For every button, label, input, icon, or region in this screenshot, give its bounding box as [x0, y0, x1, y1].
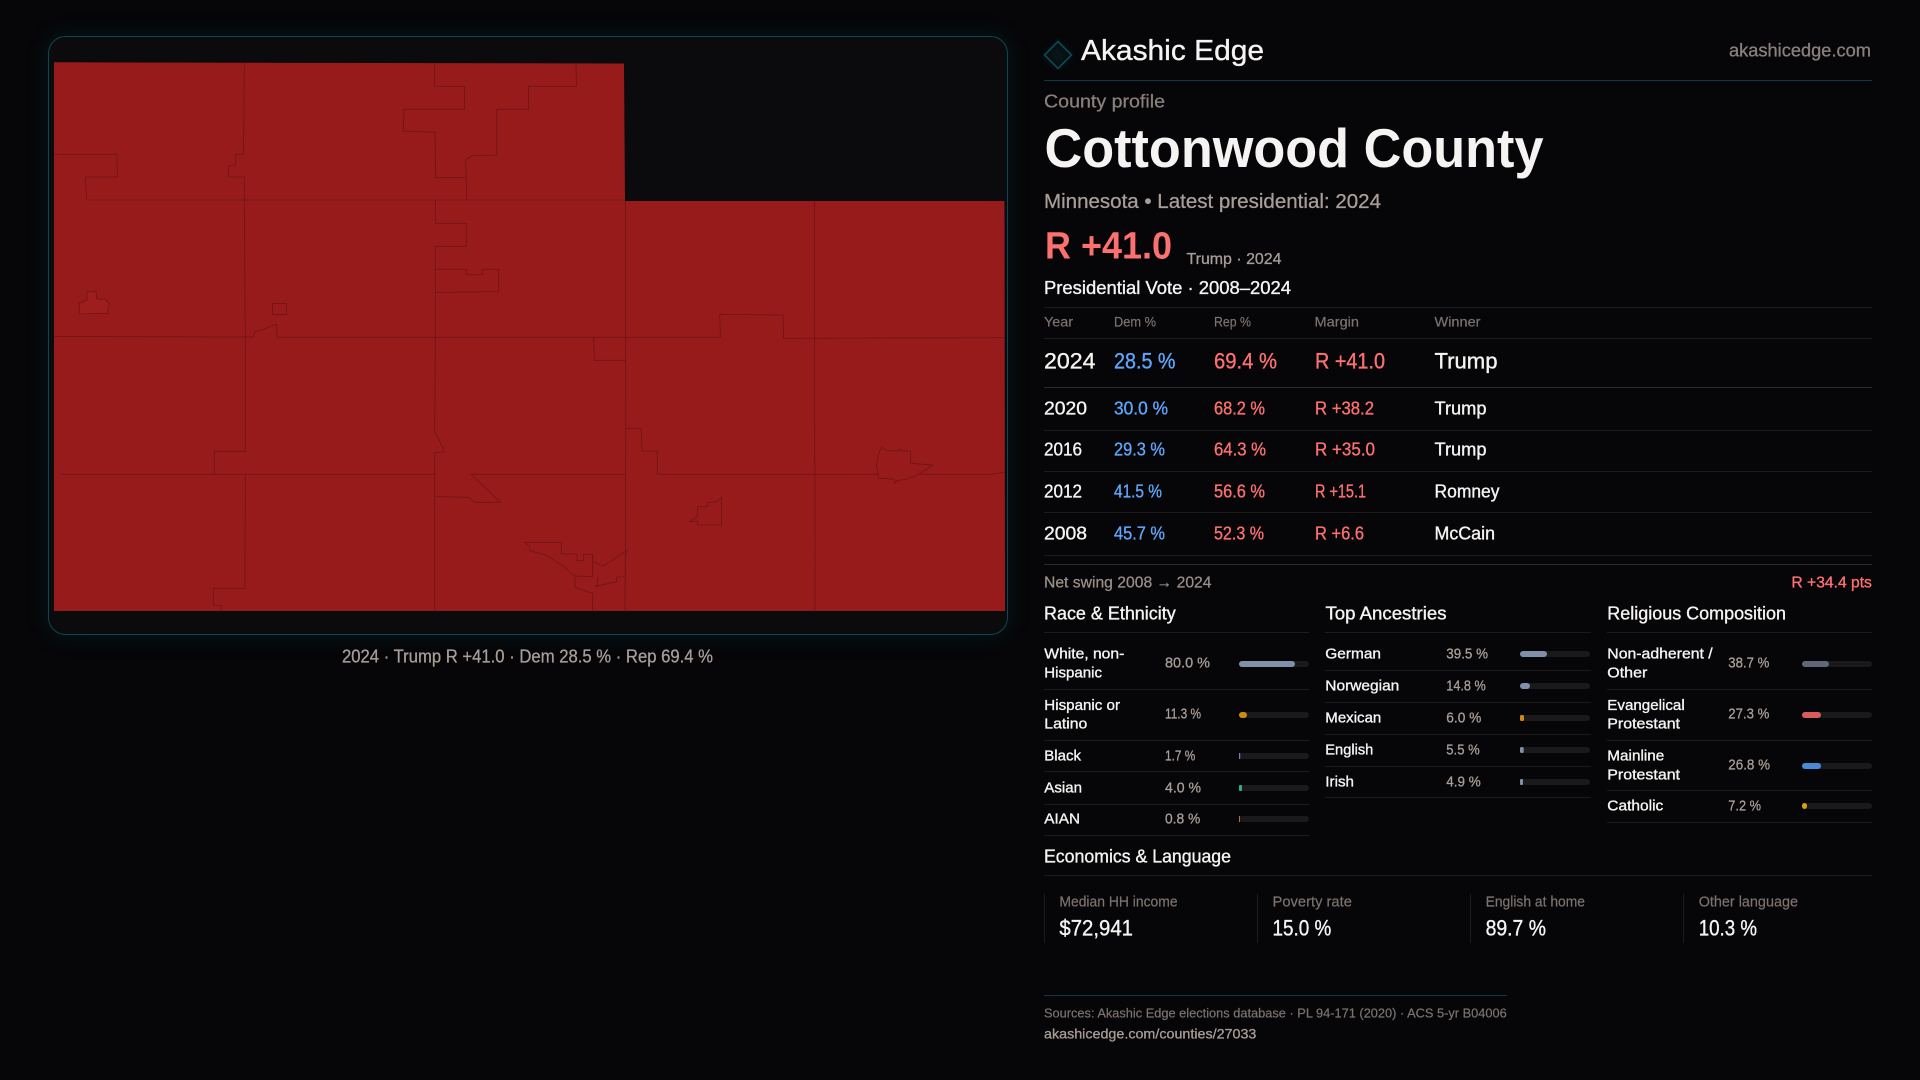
row 2016: 2016 [1044, 439, 1082, 459]
presidential vote table [1044, 308, 1872, 556]
stat: poverty rate: 15.0 % [1272, 916, 1331, 941]
row: hispanic or latino: Latino [1044, 716, 1087, 733]
row: german: German [1325, 646, 1381, 663]
table header row: Dem % [1114, 315, 1156, 330]
row: white non-hispanic [1044, 645, 1309, 681]
row 2016: Trump [1434, 439, 1486, 459]
row 2008: 52.3 % [1214, 523, 1264, 543]
row 2020: Trump [1434, 398, 1486, 418]
heading: religious composition: Religious Composition [1607, 603, 1786, 623]
row: mainline protestant: 26.8 % [1728, 756, 1770, 773]
stat: english at home: English at home [1486, 895, 1585, 911]
panel: top ancestries [1325, 603, 1591, 798]
row: evangelical protestant: 27.3 % [1728, 706, 1769, 723]
row: hispanic or latino: 11.3 % [1165, 706, 1201, 723]
row 2012: 56.6 % [1214, 481, 1265, 501]
stat: median income: Median HH income [1059, 895, 1178, 911]
stat: poverty rate: Poverty rate [1272, 895, 1352, 911]
row: mainline protestant [1607, 748, 1872, 783]
table header row: Rep % [1214, 315, 1251, 330]
row: aian: 0.8 % [1165, 811, 1200, 828]
row 2012: 2012 [1044, 481, 1082, 501]
map caption: 2024 · Trump R +41.0 · Dem 28.5 % · Rep 69.4 % [342, 646, 713, 666]
row: black: 1.7 % [1165, 748, 1195, 765]
panel: economics and language [1044, 846, 1872, 943]
row 2024: 28.5 % [1114, 348, 1176, 373]
net swing note: Net swing 2008 → 2024 [1044, 574, 1212, 591]
row: norwegian: 14.8 % [1446, 678, 1486, 695]
net swing note: R +34.4 pts [1791, 574, 1872, 591]
stat: poverty rate [1258, 894, 1352, 943]
row: non-adherent [1607, 645, 1872, 681]
row 2016 [1044, 439, 1486, 459]
row: mexican: Mexican [1325, 710, 1381, 727]
row: non-adherent: Non-adherent / [1607, 645, 1714, 662]
row: german [1325, 646, 1590, 663]
row 2020: 68.2 % [1214, 398, 1265, 418]
row: catholic: Catholic [1607, 797, 1664, 814]
brand name: Akashic Edge [1081, 35, 1264, 67]
sources footer: akashicedge.com/counties/27033 [1044, 1025, 1257, 1041]
row 2024: R +41.0 [1315, 348, 1385, 373]
row 2024 [1044, 348, 1498, 373]
heading: race and ethnicity: Race & Ethnicity [1044, 603, 1176, 623]
title: Cottonwood County [1044, 117, 1544, 179]
brand header [1044, 35, 1871, 69]
row: irish [1325, 774, 1590, 791]
map: county precincts, all Republican-won [54, 62, 1005, 611]
row: catholic [1607, 797, 1872, 814]
row: asian: 4.0 % [1165, 780, 1201, 797]
row: mexican: 6.0 % [1446, 710, 1481, 727]
row: mainline protestant: Mainline [1607, 748, 1664, 765]
heading: economics and language: Economics & Language [1044, 846, 1231, 866]
row: mainline protestant: Protestant [1607, 766, 1681, 783]
row 2020: R +38.2 [1315, 398, 1374, 418]
row: asian: Asian [1044, 780, 1082, 797]
row 2012: R +15.1 [1315, 481, 1366, 501]
row 2016: R +35.0 [1315, 439, 1375, 459]
icon: diamond logo [1044, 41, 1072, 69]
stat: english at home [1470, 894, 1585, 943]
table header row [1044, 315, 1481, 330]
row: english: 5.5 % [1446, 742, 1480, 759]
row 2024: 2024 [1044, 348, 1096, 373]
heading: top ancestries: Top Ancestries [1326, 603, 1446, 623]
row: norwegian [1325, 678, 1590, 695]
row 2008: 2008 [1044, 523, 1087, 543]
panel: county map [48, 36, 1008, 635]
row: catholic: 7.2 % [1728, 797, 1761, 814]
stat: other language: Other language [1699, 895, 1798, 911]
stat: median income [1044, 894, 1178, 943]
headline margin [1045, 226, 1282, 268]
row: white non-hispanic: Hispanic [1044, 664, 1102, 681]
row: evangelical protestant: Protestant [1607, 716, 1681, 733]
row 2008: 45.7 % [1114, 523, 1165, 543]
stat: other language: 10.3 % [1699, 916, 1757, 941]
sources footer: Sources: Akashic Edge elections database · PL 94-171 (2020) · ACS 5-yr B04006 [1044, 1007, 1507, 1021]
row: evangelical protestant [1607, 697, 1872, 733]
row: non-adherent: Other [1607, 664, 1647, 681]
row: aian: AIAN [1044, 811, 1080, 828]
row: evangelical protestant: Evangelical [1607, 697, 1685, 714]
subtitle: Minnesota • Latest presidential: 2024 [1044, 190, 1381, 213]
row 2012: 41.5 % [1114, 481, 1162, 501]
row 2020 [1044, 398, 1486, 418]
row 2020: 2020 [1044, 398, 1087, 418]
row: black: Black [1044, 748, 1081, 765]
row: aian [1044, 811, 1309, 828]
row: german: 39.5 % [1446, 646, 1488, 663]
row: non-adherent: 38.7 % [1728, 655, 1769, 672]
sources footer [1044, 1007, 1507, 1041]
row: white non-hispanic: 80.0 % [1165, 655, 1210, 672]
row: english [1325, 742, 1590, 759]
row: white non-hispanic: White, non- [1044, 645, 1124, 662]
row 2008 [1044, 523, 1495, 543]
stat: median income: $72,941 [1059, 916, 1133, 941]
table header row: Year [1044, 315, 1074, 330]
row 2008: McCain [1434, 523, 1495, 543]
row 2024: Trump [1434, 348, 1498, 373]
panel: race and ethnicity [1044, 603, 1309, 836]
row: english: English [1325, 742, 1373, 759]
row: hispanic or latino [1044, 697, 1309, 733]
table header row: Margin [1314, 315, 1359, 330]
table header row: Winner [1434, 315, 1481, 330]
table heading: Presidential Vote · 2008–2024 [1044, 278, 1291, 298]
net swing note [1044, 574, 1872, 591]
row: irish: Irish [1325, 774, 1354, 791]
row: norwegian: Norwegian [1325, 678, 1399, 695]
row: mexican [1325, 710, 1590, 727]
panel: religious composition [1607, 603, 1872, 822]
eyebrow: County profile [1044, 91, 1165, 111]
brand url: akashicedge.com [1729, 41, 1871, 61]
headline margin: R +41.0 [1045, 226, 1172, 268]
row 2016: 29.3 % [1114, 439, 1165, 459]
row 2012 [1044, 481, 1500, 501]
row: irish: 4.9 % [1446, 774, 1481, 791]
row: hispanic or latino: Hispanic or [1044, 697, 1120, 714]
row 2016: 64.3 % [1214, 439, 1266, 459]
row 2008: R +6.6 [1315, 523, 1364, 543]
row: black [1044, 748, 1309, 765]
headline margin: Trump · 2024 [1186, 251, 1282, 268]
row: asian [1044, 780, 1309, 797]
row 2024: 69.4 % [1214, 348, 1277, 373]
row 2020: 30.0 % [1114, 398, 1168, 418]
stat: other language [1684, 894, 1798, 943]
stat: english at home: 89.7 % [1486, 916, 1546, 941]
row 2012: Romney [1434, 481, 1500, 501]
